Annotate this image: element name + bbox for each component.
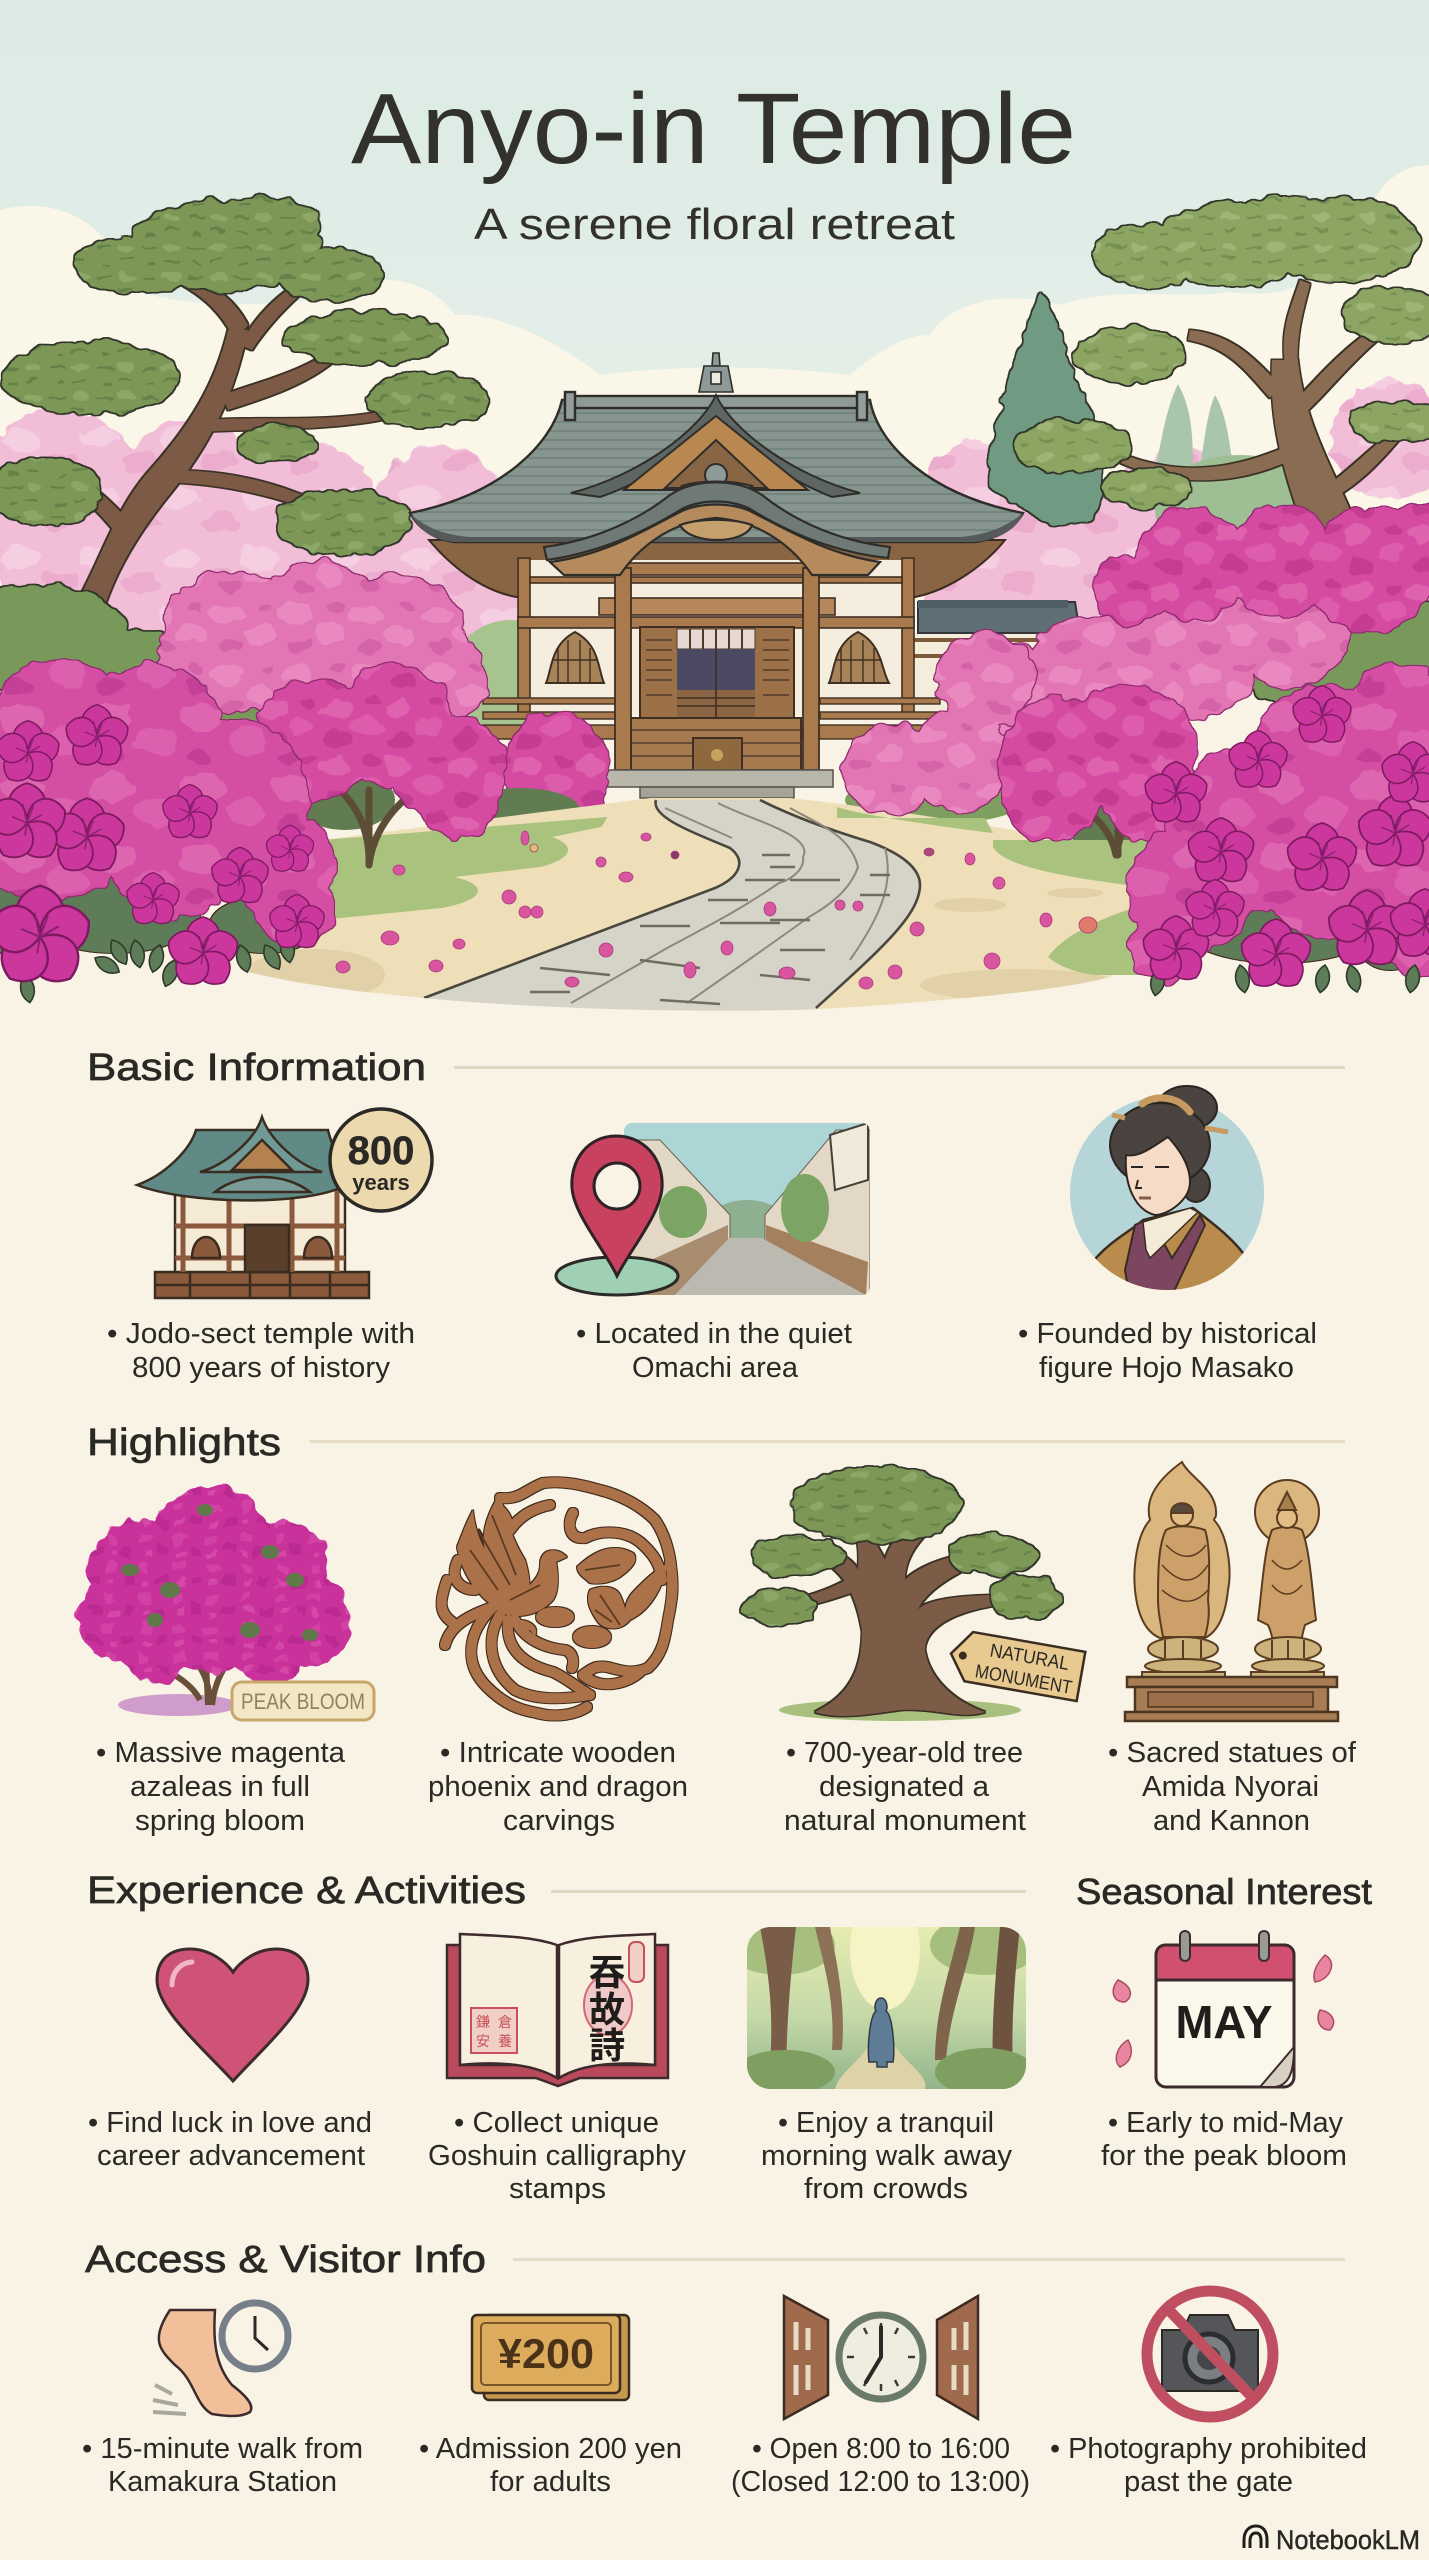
carving ring strokes bbox=[442, 1482, 673, 1715]
red seal text bbox=[476, 2014, 512, 2049]
title: Anyo-in Temple bbox=[351, 73, 1076, 185]
caption: • Jodo-sect temple with bbox=[107, 1318, 415, 1350]
soffit and rafters bbox=[429, 540, 1005, 597]
icon: wooden phoenix and dragon carving bbox=[442, 1482, 673, 1715]
badge: 800 years bbox=[330, 1109, 432, 1211]
azalea shrub trunks bbox=[340, 790, 1140, 865]
statue: Amida Nyorai bbox=[1134, 1462, 1229, 1638]
caption bbox=[428, 2107, 687, 2205]
heading: Experience & Activities: Experience & Activities bbox=[87, 1870, 526, 1912]
icon: temple doors and clock bbox=[784, 2296, 978, 2419]
vivid right bush bbox=[998, 685, 1200, 841]
icon: portrait of Hojo Masako bbox=[1070, 1086, 1264, 1300]
wall beams and posts bbox=[518, 558, 914, 713]
left pine tree bbox=[0, 198, 490, 640]
calligraphy: 故 bbox=[589, 1989, 625, 2030]
caption: spring bloom bbox=[135, 1805, 305, 1837]
caption: (Closed 12:00 to 13:00) bbox=[731, 2466, 1030, 2498]
cedar tree bbox=[990, 293, 1102, 525]
green shrub under azaleas bbox=[295, 770, 1170, 860]
caption: phoenix and dragon bbox=[428, 1771, 688, 1803]
calligraphy: 詩 bbox=[589, 2025, 625, 2066]
right pine foliage bbox=[1014, 197, 1429, 506]
offering box bbox=[693, 738, 742, 773]
caption: • Collect unique bbox=[454, 2107, 659, 2139]
sky bbox=[0, 0, 1429, 640]
icon: May calendar: MAY bbox=[1176, 1996, 1272, 2048]
sakura petals bbox=[1113, 1955, 1334, 2067]
stone base bbox=[601, 770, 833, 798]
caption: morning walk away bbox=[761, 2140, 1012, 2172]
section: Experience & Activities bbox=[87, 1870, 1040, 2096]
green hedge left behind temple bbox=[450, 620, 570, 740]
icon: forest walk scene bbox=[747, 1927, 1026, 2089]
heading: Basic Information: Basic Information bbox=[87, 1047, 426, 1089]
caption bbox=[96, 1737, 346, 1837]
caption: • Find luck in love and bbox=[88, 2107, 372, 2139]
badge: 800 years: 800 bbox=[348, 1129, 414, 1173]
walker bbox=[868, 1998, 894, 2067]
pale distant azaleas bbox=[0, 380, 1429, 660]
main roof bbox=[410, 392, 1023, 542]
icon: May calendar bbox=[1113, 1931, 1334, 2087]
caption bbox=[761, 2107, 1012, 2205]
caption bbox=[428, 1737, 688, 1837]
vivid center left bush bbox=[255, 665, 505, 838]
map base bbox=[556, 1257, 678, 1295]
caption: • Early to mid-May bbox=[1108, 2107, 1343, 2139]
caption: • Enjoy a tranquil bbox=[778, 2107, 994, 2139]
temple bbox=[410, 353, 1080, 798]
walls bbox=[518, 560, 914, 715]
caption: Goshuin calligraphy bbox=[428, 2140, 687, 2172]
caption: • 15-minute walk from bbox=[82, 2433, 363, 2465]
leaf fringe right bbox=[1148, 963, 1422, 997]
caption: for adults bbox=[490, 2466, 611, 2498]
icon: 200 yen ticket: ¥200 bbox=[498, 2330, 594, 2377]
tag: natural monument: MONUMENT bbox=[973, 1661, 1074, 1699]
icon: 200 yen ticket bbox=[472, 2315, 629, 2400]
calligraphy: 吞 bbox=[589, 1952, 625, 1993]
clouds bbox=[536, 1607, 611, 1648]
caption: stamps bbox=[509, 2173, 606, 2205]
foreground right azaleas bbox=[1128, 665, 1429, 997]
caption: Amida Nyorai bbox=[1142, 1771, 1319, 1803]
icon: azalea shrub bbox=[78, 1485, 374, 1720]
caption bbox=[1101, 2107, 1347, 2172]
flowers left bbox=[0, 705, 328, 992]
right pine trunk bbox=[1121, 280, 1405, 540]
caption: azaleas in full bbox=[130, 1771, 310, 1803]
red seal text: 安 bbox=[476, 2033, 490, 2049]
caption: career advancement bbox=[97, 2140, 365, 2172]
statue: Kannon bbox=[1255, 1480, 1319, 1638]
badge: 800 years: years bbox=[352, 1170, 410, 1195]
stairs bbox=[631, 718, 801, 770]
caption: and Kannon bbox=[1153, 1805, 1310, 1837]
red seal text: 倉 bbox=[498, 2014, 512, 2030]
leaves right bbox=[1180, 880, 1429, 970]
NotebookLM logo: NotebookLM bbox=[1276, 2525, 1420, 2555]
icon: no photography bbox=[1147, 2291, 1273, 2417]
heading: Seasonal Interest: Seasonal Interest bbox=[1076, 1871, 1372, 1912]
caption: • Sacred statues of bbox=[1108, 1737, 1357, 1769]
icon: Goshuin stamp book bbox=[447, 1934, 668, 2086]
foreground left azaleas bbox=[0, 660, 337, 1004]
section: Seasonal Interest bbox=[1076, 1871, 1372, 2172]
icon: 700-year-old tree with tag bbox=[744, 1467, 1085, 1721]
caption: from crowds bbox=[804, 2173, 968, 2205]
tag: natural monument bbox=[947, 1629, 1085, 1701]
green hedge bushes bbox=[0, 585, 1429, 732]
caption: Omachi area bbox=[632, 1352, 799, 1384]
caption: designated a bbox=[819, 1771, 990, 1803]
tag: natural monument: NATURAL bbox=[988, 1640, 1071, 1675]
calligraphy bbox=[589, 1952, 625, 2066]
veranda rails bbox=[483, 698, 940, 739]
leaves left bbox=[0, 840, 320, 960]
flowers right bbox=[1139, 686, 1429, 994]
caption: • Open 8:00 to 16:00 bbox=[752, 2433, 1010, 2465]
phoenix bbox=[457, 1493, 567, 1636]
stone path bbox=[424, 800, 920, 1015]
icon: temple with 800 years badge bbox=[137, 1109, 432, 1298]
caption: natural monument bbox=[784, 1805, 1026, 1837]
caption: for the peak bloom bbox=[1101, 2140, 1347, 2172]
bush body right bbox=[1128, 665, 1429, 981]
side hall bbox=[910, 600, 1080, 713]
door area bbox=[640, 627, 794, 718]
grass patches bbox=[320, 807, 1150, 975]
leaf fringe left bbox=[18, 934, 297, 1004]
upper gable bbox=[571, 395, 860, 497]
feather and scale lines bbox=[470, 1515, 620, 1625]
medium pink azaleas bbox=[160, 560, 1352, 745]
caption bbox=[1108, 1737, 1357, 1837]
section: Basic Information bbox=[87, 1047, 1345, 1384]
caption: carvings bbox=[503, 1805, 615, 1837]
fallen petals bbox=[336, 831, 1097, 989]
caption: • Intricate wooden bbox=[440, 1737, 676, 1769]
tag: peak bloom: PEAK BLOOM bbox=[241, 1689, 365, 1714]
curved karahafu roof bbox=[544, 482, 890, 575]
location pin bbox=[572, 1136, 662, 1276]
vivid mid azaleas bbox=[503, 505, 1429, 818]
caption: • 700-year-old tree bbox=[786, 1737, 1023, 1769]
subtitle: A serene floral retreat bbox=[474, 200, 955, 249]
arched windows bbox=[546, 632, 889, 683]
activity captions bbox=[88, 2107, 1012, 2205]
face bbox=[1126, 1137, 1190, 1215]
red seal text: 養 bbox=[498, 2033, 512, 2049]
caption: Kamakura Station bbox=[108, 2466, 337, 2498]
section: Highlights bbox=[78, 1422, 1357, 1837]
distant light trees bbox=[1155, 384, 1325, 565]
hair bbox=[1110, 1086, 1217, 1202]
lotus bases bbox=[1142, 1637, 1324, 1677]
caption: figure Hojo Masako bbox=[1039, 1352, 1294, 1384]
icon: sacred statues bbox=[1125, 1462, 1338, 1721]
lower roof shadow edge bbox=[410, 513, 1023, 542]
sand shading bbox=[245, 888, 1120, 1001]
hero illustration bbox=[0, 0, 1429, 1015]
section: Access & Visitor Info bbox=[82, 2239, 1367, 2498]
tag: peak bloom bbox=[232, 1682, 374, 1720]
bush body left bbox=[0, 660, 337, 945]
caption: • Located in the quiet bbox=[576, 1318, 852, 1350]
caption: • Admission 200 yen bbox=[419, 2433, 682, 2465]
caption bbox=[107, 1318, 415, 1384]
red seal text: 鎌 bbox=[476, 2014, 490, 2030]
caption: past the gate bbox=[1124, 2466, 1293, 2498]
caption bbox=[1050, 2433, 1367, 2498]
caption bbox=[1018, 1318, 1317, 1384]
right center bushes bbox=[844, 632, 1033, 816]
caption: • Photography prohibited bbox=[1050, 2433, 1367, 2465]
icon: heart bbox=[157, 1949, 308, 2081]
roof finial bbox=[699, 353, 733, 392]
main columns bbox=[615, 568, 819, 770]
icon: street with location pin bbox=[556, 1123, 870, 1295]
caption bbox=[784, 1737, 1026, 1837]
caption bbox=[731, 2433, 1030, 2498]
caption bbox=[88, 2107, 372, 2172]
ground bbox=[240, 798, 1180, 1011]
left pine foliage bbox=[0, 198, 490, 554]
heading: Highlights: Highlights bbox=[87, 1422, 281, 1464]
clouds bbox=[0, 165, 1429, 640]
icon: walking foot and clock bbox=[153, 2303, 288, 2416]
caption bbox=[576, 1318, 852, 1384]
heading: Access & Visitor Info: Access & Visitor Info bbox=[85, 2239, 486, 2281]
pedestal bbox=[1125, 1677, 1338, 1721]
left pine trunk bbox=[40, 265, 412, 640]
right pine tree bbox=[1014, 197, 1429, 540]
caption: • Founded by historical bbox=[1018, 1318, 1317, 1350]
caption: 800 years of history bbox=[132, 1352, 391, 1384]
caption bbox=[82, 2433, 363, 2498]
caption: • Massive magenta bbox=[96, 1737, 346, 1769]
caption bbox=[419, 2433, 682, 2498]
dragon bbox=[577, 1548, 668, 1628]
